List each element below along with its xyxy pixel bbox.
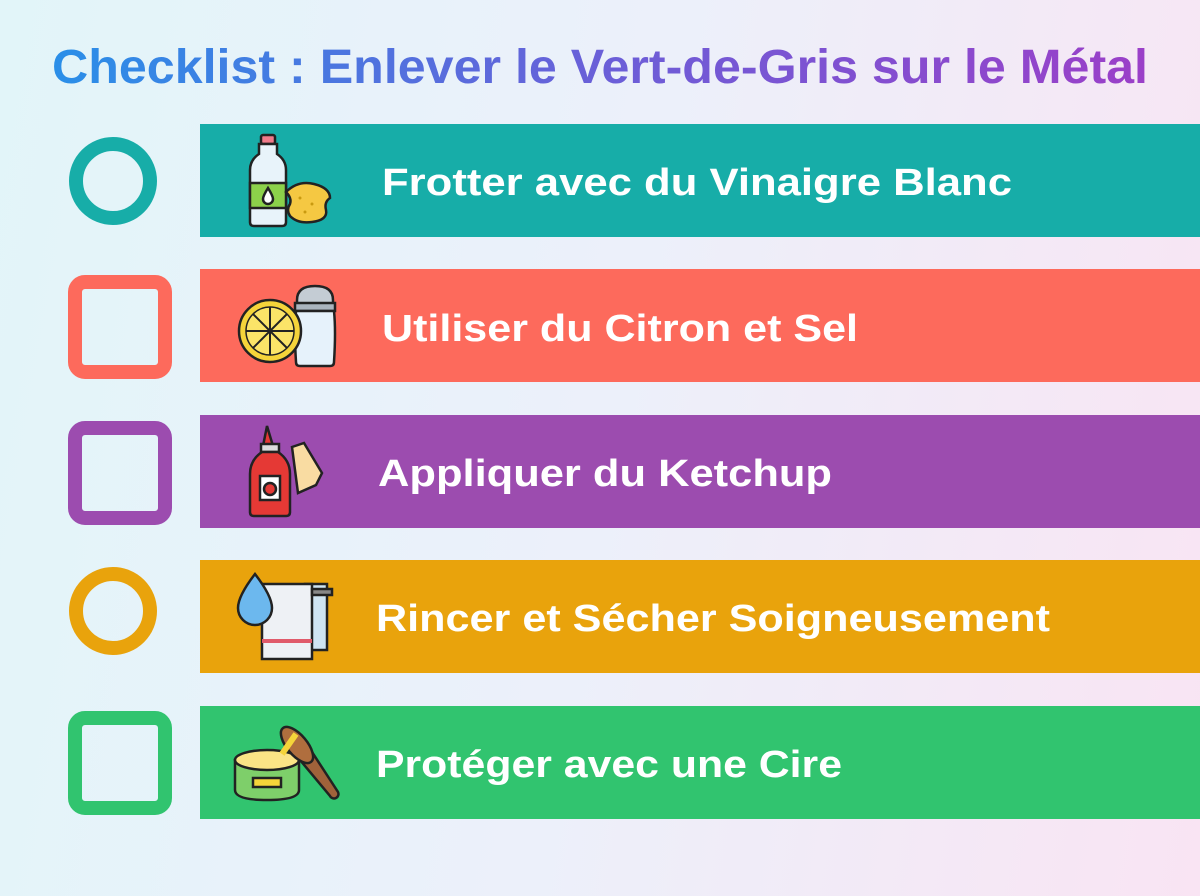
checkbox square coral: [75, 282, 165, 372]
label: Rincer et Sécher Soigneusement: [376, 598, 1050, 640]
checkbox circle teal: [76, 144, 150, 218]
icon: wax and brush: [235, 722, 338, 800]
label: Appliquer du Ketchup: [378, 453, 832, 495]
row 3: ketchup: [75, 415, 1200, 528]
bar coral: [200, 269, 1200, 382]
icon: bottle and sponge: [250, 135, 330, 226]
checkbox square purple: [75, 428, 165, 518]
title: Checklist : Enlever le Vert-de-Gris sur le Métal: [52, 41, 1148, 94]
label: Protéger avec une Cire: [376, 744, 842, 786]
icon: towel and drop: [238, 574, 332, 659]
icon: ketchup and cloth: [250, 426, 322, 516]
checkbox square green: [75, 718, 165, 808]
checkbox circle amber: [76, 574, 150, 648]
label: Utiliser du Citron et Sel: [382, 308, 858, 350]
bar purple: [200, 415, 1200, 528]
label: Frotter avec du Vinaigre Blanc: [382, 162, 1012, 204]
row 1: vinaigre: [76, 124, 1200, 237]
row 5: cire: [75, 706, 1200, 819]
bar amber: [200, 560, 1200, 673]
bar green: [200, 706, 1200, 819]
row 2: citron: [75, 269, 1200, 382]
row 4: rincer: [76, 560, 1200, 673]
bar teal: [200, 124, 1200, 237]
icon: lemon and salt: [239, 286, 335, 366]
